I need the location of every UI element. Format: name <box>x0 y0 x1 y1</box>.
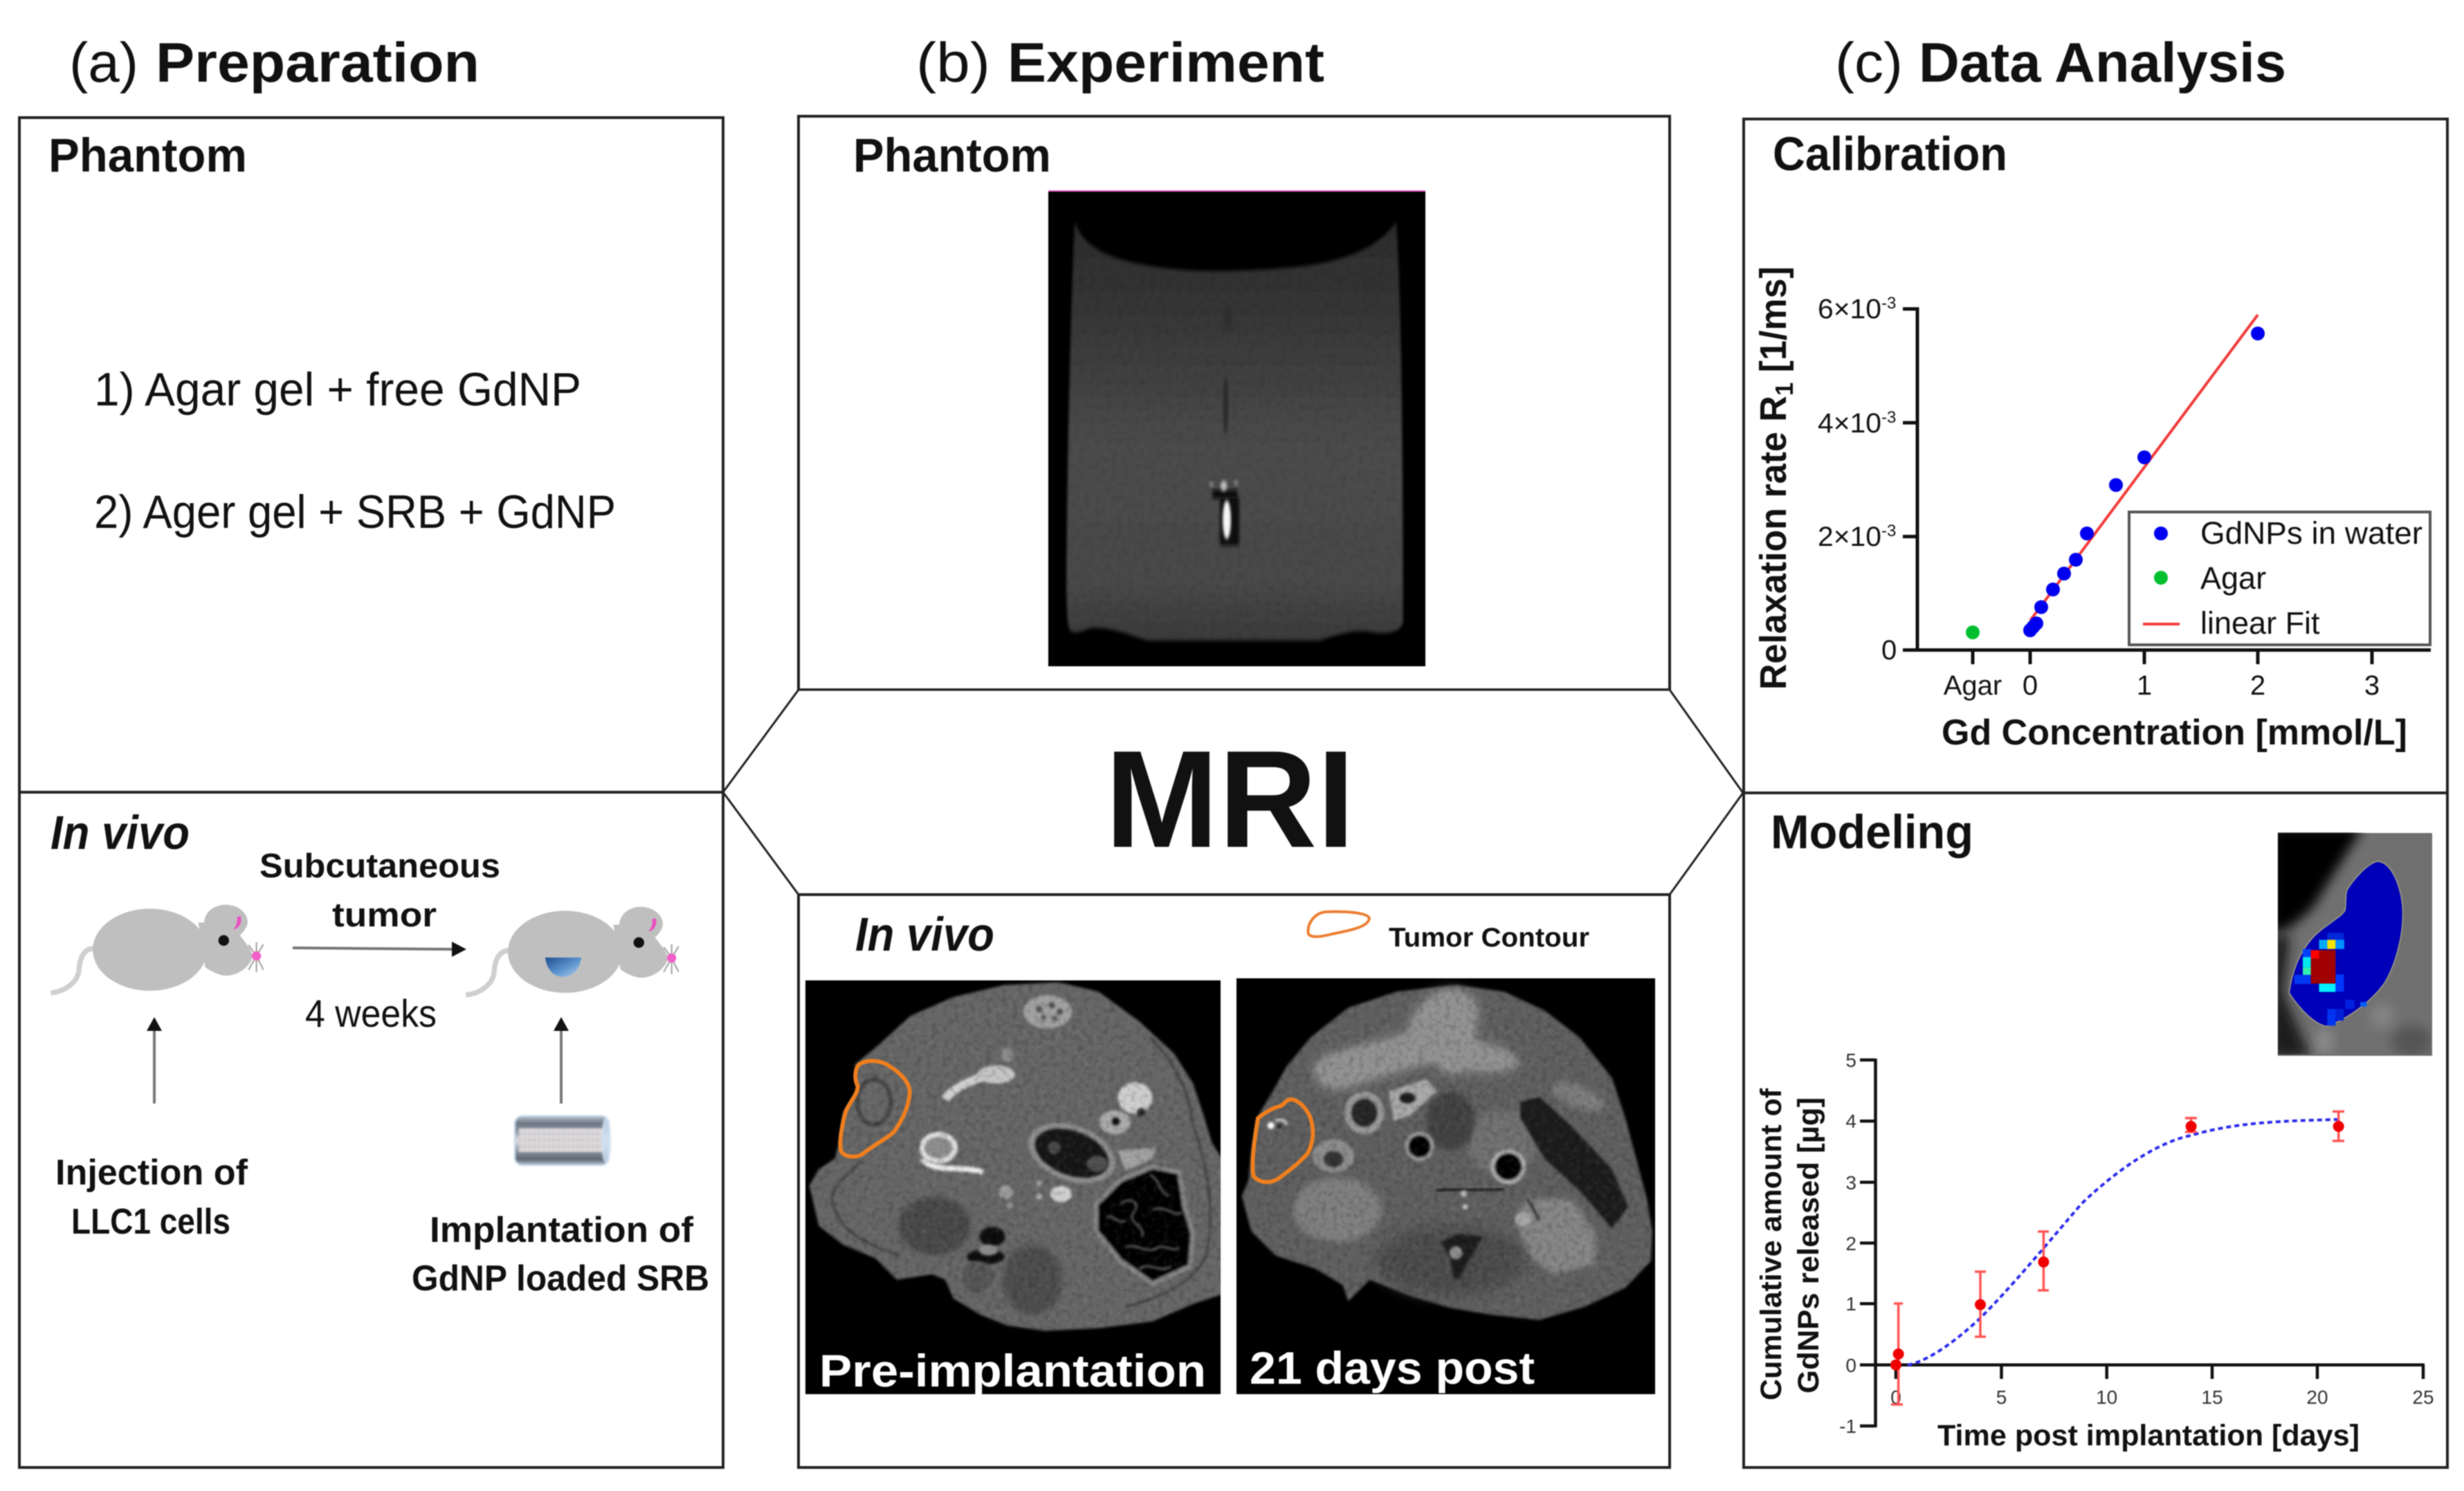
y tick labels: 3 <box>1845 1172 1856 1193</box>
x axis title: Gd Concentration [mmol/L] <box>1942 713 2407 753</box>
x tick labels: 20 <box>2306 1387 2328 1408</box>
chart: relaxation rate vs Gd concentration <box>1753 266 2431 753</box>
x tick labels: 0 <box>2023 670 2038 701</box>
fit curve <box>1908 1119 2339 1365</box>
heading: (c) Data Analysis: (c) <box>1835 32 1903 94</box>
y axis title: [1/ms] <box>1753 266 1794 383</box>
panel heading: Phantom: Phantom <box>48 129 247 182</box>
arrow: implantation <box>554 1017 569 1104</box>
x tick labels: 10 <box>2096 1387 2117 1408</box>
y tick labels: 2 <box>1845 1233 1856 1254</box>
text: injection of LLC1 cells: Injection of <box>55 1153 248 1193</box>
y tick labels: 4 <box>1845 1110 1856 1132</box>
y tick labels <box>1818 294 1897 666</box>
image: 21 days post MRI scan <box>1236 978 1655 1394</box>
text: injection of LLC1 cells: LLC1 cells <box>71 1202 230 1242</box>
x tick labels <box>1944 670 2380 701</box>
panel: preparation phantom <box>19 118 723 792</box>
x tick labels: 5 <box>1996 1387 2007 1408</box>
panel heading: Modeling: Modeling <box>1771 805 1973 859</box>
legend: GdNPs in water <box>2200 515 2422 551</box>
panel heading: In vivo: In vivo <box>51 806 190 859</box>
x tick labels <box>1890 1387 2434 1408</box>
arrow: injection <box>147 1017 162 1104</box>
text: 4 weeks: 4 weeks <box>305 991 437 1035</box>
y tick labels: 0 <box>1845 1355 1856 1376</box>
heading: (a) Preparation: (a) <box>69 32 138 94</box>
x axis title: Time post implantation [days] <box>1937 1419 2360 1452</box>
text: step 1: 1) Agar gel + free GdNP <box>94 363 581 416</box>
x tick labels: 1 <box>2137 670 2152 701</box>
data points: GdNPs in water <box>2023 327 2265 637</box>
y tick labels: 6×10 <box>1818 294 1881 324</box>
data points <box>1890 1121 2344 1371</box>
heading: (b) Experiment: Experiment <box>1007 32 1324 94</box>
image: pre-implantation MRI scan <box>805 980 1225 1396</box>
icon: mouse before tumor <box>51 905 264 993</box>
panel heading: Phantom: Phantom <box>853 129 1051 182</box>
panel: calibration <box>1744 119 2447 793</box>
x tick labels: 0 <box>1890 1387 1901 1408</box>
text: subcutaneous tumor: Subcutaneous <box>259 848 500 885</box>
callout: MRI hexagon <box>723 690 1743 895</box>
legend: Agar <box>2200 560 2266 596</box>
y axis title: 1 <box>1770 383 1798 396</box>
heading: (b) Experiment: (b) <box>916 32 990 94</box>
y tick labels: -1 <box>1839 1416 1856 1437</box>
heading: (c) Data Analysis: Data Analysis <box>1919 32 2286 94</box>
text: implantation of GdNP loaded SRB: GdNP loaded SRB <box>412 1259 709 1299</box>
panel: experiment in vivo <box>798 895 1670 1467</box>
y axis title: GdNPs released [µg] <box>1792 1097 1825 1393</box>
legend: linear Fit <box>2200 605 2320 641</box>
y axis title: Cumulative amount of <box>1755 1088 1788 1400</box>
text: injection of LLC1 cells <box>55 1153 248 1242</box>
text: subcutaneous tumor <box>259 848 500 934</box>
text: 21 days post label: 21 days post <box>1250 1342 1535 1393</box>
panel heading: In vivo: In vivo <box>855 908 994 961</box>
y tick labels: 1 <box>1845 1293 1856 1315</box>
text: implantation of GdNP loaded SRB: Implantation of <box>430 1210 694 1250</box>
y axis title: Relaxation rate R <box>1753 385 1794 690</box>
y tick labels: 0 <box>1881 635 1897 666</box>
text: implantation of GdNP loaded SRB <box>412 1210 709 1299</box>
y tick labels: 4×10 <box>1818 408 1881 439</box>
panel heading: Calibration: Calibration <box>1773 127 2007 181</box>
y tick labels: -3 <box>1881 294 1896 313</box>
icon: mouse with tumor <box>466 907 679 995</box>
x tick labels: 2 <box>2250 670 2265 701</box>
y axis title <box>1755 1088 1825 1400</box>
icon: SRB implant <box>515 1116 611 1165</box>
y tick labels: 2×10 <box>1818 522 1881 552</box>
text: subcutaneous tumor: tumor <box>332 897 437 934</box>
axes <box>1860 1059 2425 1427</box>
image: phantom MRI scan <box>1048 191 1425 666</box>
icon: subcutaneous tumor <box>545 958 581 977</box>
x tick labels: 15 <box>2201 1387 2223 1408</box>
y tick labels: -3 <box>1881 408 1896 427</box>
tumor outline <box>1252 1099 1313 1182</box>
text: MRI: MRI <box>1105 722 1355 877</box>
text: step 2: 2) Ager gel + SRB + GdNP <box>94 486 616 538</box>
y tick labels <box>1839 1050 1856 1437</box>
text: pre-implantation label: Pre-implantation <box>819 1345 1206 1396</box>
linear fit line <box>2030 315 2258 621</box>
legend: tumor contour <box>1308 912 1589 953</box>
error bars <box>1891 1111 2344 1405</box>
axes <box>1903 307 2431 664</box>
y tick labels: -3 <box>1881 522 1896 540</box>
panel: experiment phantom <box>798 116 1670 690</box>
arrow: 4 weeks progression <box>293 942 466 957</box>
x tick labels: 3 <box>2364 670 2380 701</box>
heading: (a) Preparation: Preparation <box>156 32 480 94</box>
panel: preparation in vivo <box>19 792 723 1467</box>
image: GdNP concentration heat map <box>2270 827 2432 1057</box>
y tick labels: 5 <box>1845 1050 1856 1071</box>
tumor outline <box>840 1061 910 1157</box>
panel: modeling <box>1744 793 2447 1467</box>
legend <box>2129 512 2430 645</box>
chart: cumulative GdNP release <box>1755 1050 2434 1452</box>
x tick labels: Agar <box>1944 670 2002 701</box>
data point: agar <box>1966 625 1980 639</box>
x tick labels: 25 <box>2412 1387 2434 1408</box>
legend: tumor contour: Tumor Contour <box>1389 923 1589 953</box>
